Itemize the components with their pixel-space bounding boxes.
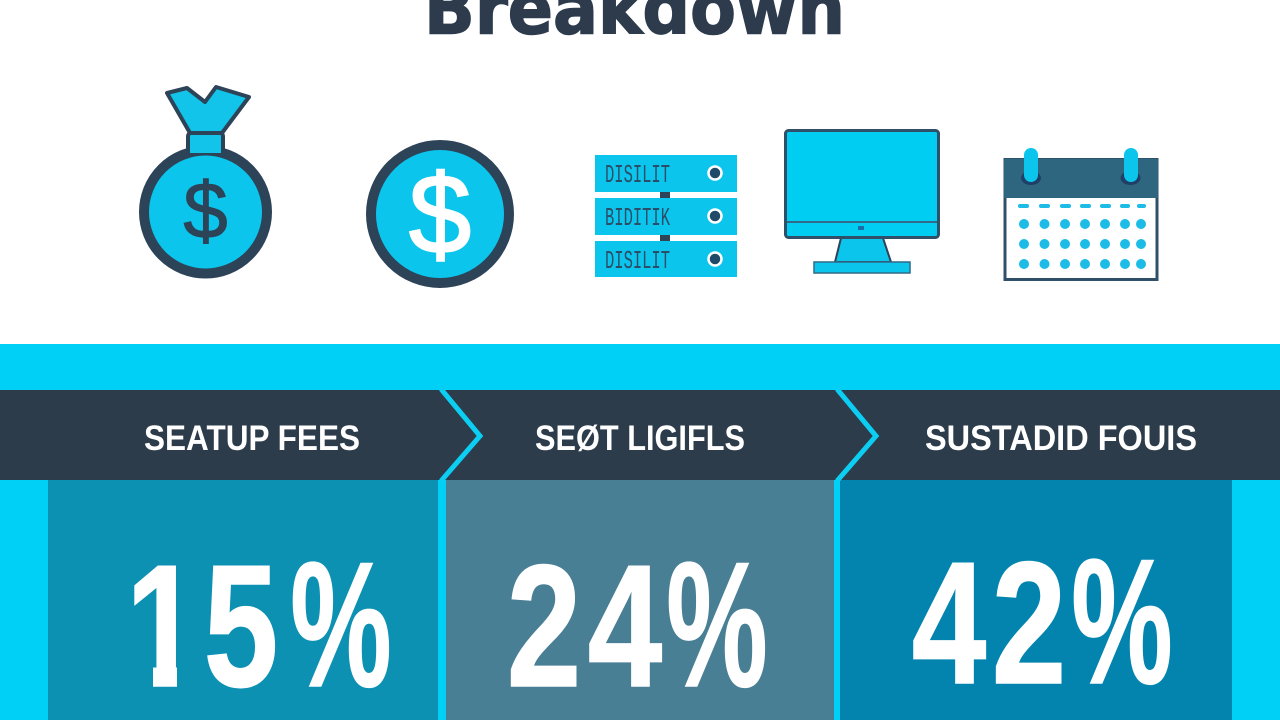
header label three: SUSTADID FOUIS <box>925 419 1197 458</box>
panel: second category <box>446 480 834 720</box>
percentage: 24%: 24 <box>507 528 662 720</box>
separators between panels <box>438 480 840 720</box>
header label one: SEATUP FEES <box>144 419 360 458</box>
icon: server stack <box>595 155 737 277</box>
panel: third category <box>840 480 1232 720</box>
panel: setup fees <box>48 480 438 720</box>
icon: calendar <box>1004 148 1158 280</box>
percentage: 42%: 42 <box>912 525 1066 720</box>
icon: dollar coin <box>371 145 509 283</box>
header label two: SEØT LIGIFLS <box>535 419 745 458</box>
percentage: 24%: % <box>666 525 768 720</box>
percentage: 24% <box>507 525 768 720</box>
icon: server stack: DISILIT <box>605 160 670 190</box>
header bar <box>0 389 1280 481</box>
icon: dollar coin: $ <box>409 152 471 277</box>
arrow: chevron divider one <box>441 389 480 481</box>
icon: money bag: $ <box>183 166 228 255</box>
percentage: 42% <box>912 522 1173 720</box>
icon: money bag <box>144 87 267 274</box>
percentage: 15%: 15 <box>126 528 278 720</box>
percentage: 15% <box>120 525 392 720</box>
arrow: chevron divider two <box>837 389 876 481</box>
icon: desktop monitor <box>786 130 938 273</box>
percentage: 15%: % <box>290 525 392 720</box>
icon row <box>144 87 1158 283</box>
icon: server stack: BIDITIK <box>605 203 670 233</box>
icon: server stack: DISILIT <box>605 246 670 276</box>
percentage: 42%: % <box>1071 522 1173 720</box>
cyan band and side bars <box>0 344 1280 720</box>
